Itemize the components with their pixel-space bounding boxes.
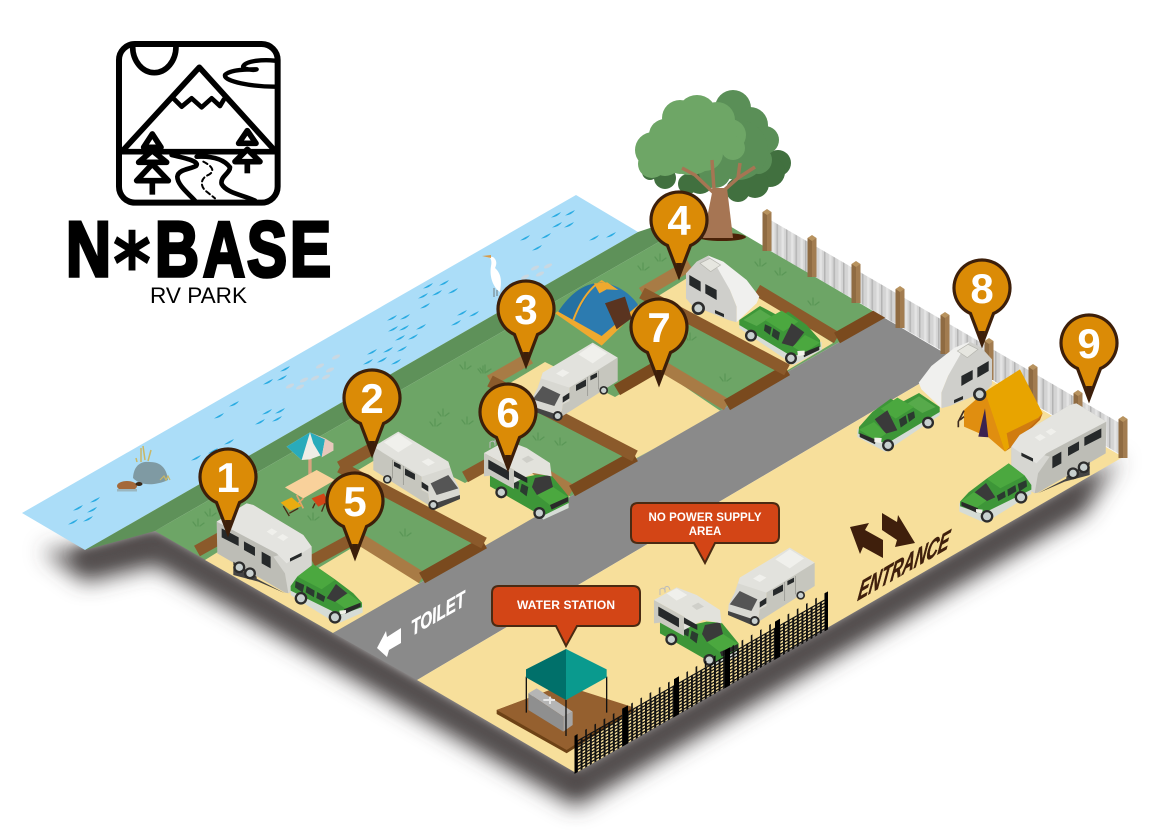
icon: rock with reeds bbox=[133, 446, 170, 484]
pin 7 bbox=[631, 299, 687, 383]
toilet text: TOILET bbox=[410, 586, 468, 641]
logo wordmark: * bbox=[113, 215, 151, 315]
timber lot borders bbox=[197, 265, 883, 578]
vehicle: caravan at lot 9 bbox=[1011, 403, 1106, 493]
pin 5 bbox=[327, 473, 383, 557]
tree canopy front bbox=[635, 95, 746, 178]
ground shadow bbox=[42, 457, 1123, 807]
river bank bbox=[85, 222, 692, 550]
vehicle: teardrop trailer at lot 8 bbox=[919, 342, 992, 408]
entrance marking bbox=[850, 513, 953, 607]
tree trunk bbox=[682, 160, 755, 241]
icon: blue dome tent bbox=[555, 280, 642, 346]
pin 6 bbox=[480, 384, 536, 468]
lawn bbox=[155, 222, 883, 633]
callout: no power supply area: AREA bbox=[689, 526, 721, 538]
vehicle: caravan at lot 1 bbox=[217, 503, 312, 593]
road bbox=[333, 317, 958, 680]
pin 3: 3 bbox=[514, 286, 538, 333]
front iron fence bbox=[574, 591, 828, 774]
entrance arrows bbox=[850, 513, 915, 558]
pin 1 bbox=[200, 449, 256, 533]
logo subtitle: RV PARK bbox=[150, 283, 247, 308]
back fence bbox=[762, 209, 1128, 458]
logo emblem bbox=[119, 44, 278, 203]
pin 2 bbox=[344, 370, 400, 454]
icon: egret bbox=[482, 255, 501, 297]
tree bbox=[635, 90, 791, 241]
map ground bbox=[22, 195, 1123, 773]
logo wordmark bbox=[66, 205, 331, 315]
icon: turtle bbox=[117, 481, 142, 492]
callout: water station: WATER STATION bbox=[517, 598, 615, 612]
logo bbox=[66, 44, 331, 315]
river bbox=[22, 195, 638, 550]
callout: water station bbox=[492, 586, 640, 646]
vehicle: pickup at lot 4 bbox=[739, 306, 822, 365]
logo wordmark: N bbox=[66, 205, 111, 293]
water station bbox=[497, 649, 635, 753]
callout: no power supply area bbox=[631, 503, 779, 563]
pin 3 bbox=[498, 281, 554, 365]
river ripples bbox=[68, 210, 616, 524]
fish shoals bbox=[285, 262, 553, 391]
vehicle: truck camper in no power area bbox=[654, 586, 739, 667]
vehicle: motorhome in no power area bbox=[728, 548, 815, 626]
pin 7: 7 bbox=[647, 304, 671, 351]
vehicle: motorhome at lot 2 bbox=[373, 432, 460, 510]
tree base shadow bbox=[698, 233, 746, 241]
vehicle: motorhome at lot 3 bbox=[531, 343, 618, 421]
logo wordmark: E bbox=[290, 205, 331, 293]
pin 2: 2 bbox=[360, 375, 384, 422]
arrow pointing to toilet bbox=[377, 628, 401, 657]
vehicle: SUV at lot 1 bbox=[291, 564, 363, 624]
grass tufts bbox=[193, 254, 819, 536]
entrance text: ENTRANCE bbox=[856, 522, 953, 607]
pin 1: 1 bbox=[216, 454, 240, 501]
pin 9 bbox=[1061, 315, 1117, 399]
logo wordmark: B bbox=[155, 205, 199, 293]
logo wordmark: S bbox=[247, 205, 287, 293]
pin 8: 8 bbox=[970, 265, 994, 312]
callout: no power supply area: NO POWER SUPPLY bbox=[648, 512, 762, 524]
tree canopy back bbox=[642, 90, 791, 202]
pin 6: 6 bbox=[496, 389, 520, 436]
entrance sand yard bbox=[417, 361, 1123, 773]
pin 4: 4 bbox=[667, 197, 691, 244]
icon: orange tent bbox=[958, 369, 1043, 452]
pin 5: 5 bbox=[343, 478, 367, 525]
vehicle: truck camper at lot 6 bbox=[484, 439, 569, 520]
sand of lot 1 and lot 5 bbox=[205, 535, 422, 633]
icon: picnic table, umbrella and chairs bbox=[281, 432, 335, 516]
logo wordmark: A bbox=[203, 205, 245, 293]
pin 9: 9 bbox=[1077, 320, 1101, 367]
vehicle: teardrop trailer at lot 4 bbox=[686, 256, 759, 322]
vehicle: SUV at lot 9 bbox=[959, 463, 1031, 523]
pin 4 bbox=[651, 192, 707, 276]
vehicle: pickup at lot 8 bbox=[857, 393, 940, 452]
sand of lot 3 and lot 7 bbox=[505, 362, 722, 460]
road label: toilet bbox=[377, 586, 468, 657]
pin 8 bbox=[954, 260, 1010, 344]
sand of lot 4 bbox=[655, 270, 833, 373]
sand of lot 2 and lot 6 bbox=[355, 448, 572, 547]
